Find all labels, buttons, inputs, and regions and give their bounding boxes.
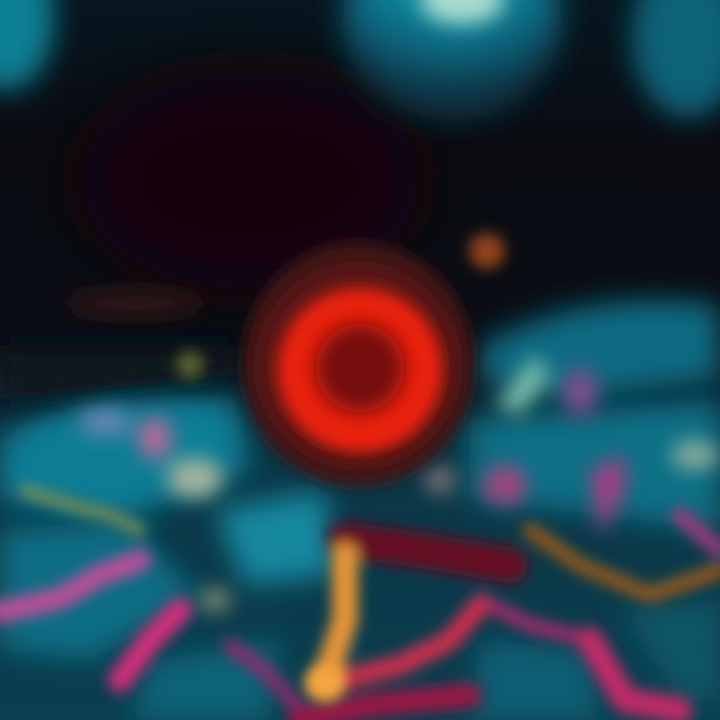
bright yellow base glow	[305, 665, 345, 701]
faint brown streak left	[65, 289, 205, 317]
line: orange vertical	[325, 555, 345, 680]
top orbs	[0, 0, 720, 120]
line: pink left	[0, 560, 140, 612]
dark centre	[316, 324, 404, 412]
line: pink top right	[680, 515, 720, 550]
line: olive left	[25, 490, 140, 530]
dark maroon haze	[80, 70, 420, 290]
teal landscape	[0, 300, 720, 720]
line: crimson bottom	[300, 695, 470, 720]
teal patch: right field	[470, 400, 720, 530]
red target circle	[242, 242, 474, 486]
orb: top left	[0, 0, 54, 90]
line: magenta lower left	[120, 610, 180, 680]
line: dark crimson	[345, 540, 510, 565]
orb: top right	[632, 0, 720, 118]
teal patch: bottom right	[470, 640, 600, 720]
squiggle lines	[0, 490, 720, 720]
line: magenta far right	[590, 640, 680, 710]
dark gap	[0, 345, 240, 400]
teal patch: bottom left	[130, 640, 280, 720]
line: orange right	[530, 530, 720, 595]
orb highlight	[420, 0, 504, 24]
small orange orb	[469, 233, 505, 269]
teal patch: far right	[620, 600, 720, 700]
line: magenta right	[480, 600, 590, 640]
teal patch: left field	[0, 395, 250, 520]
line: magenta bottom	[230, 645, 300, 710]
orb: top centre	[342, 0, 562, 120]
outer dark ring	[242, 242, 474, 486]
small olive dot	[176, 351, 204, 379]
teal patch: right ridge	[480, 300, 720, 400]
teal patch: centre bright	[215, 490, 335, 585]
bright red ring	[278, 288, 442, 452]
line: red bottom	[320, 605, 480, 685]
teal patch: lower left	[0, 520, 200, 660]
pastel patches	[79, 355, 719, 612]
mid ring	[260, 268, 456, 464]
